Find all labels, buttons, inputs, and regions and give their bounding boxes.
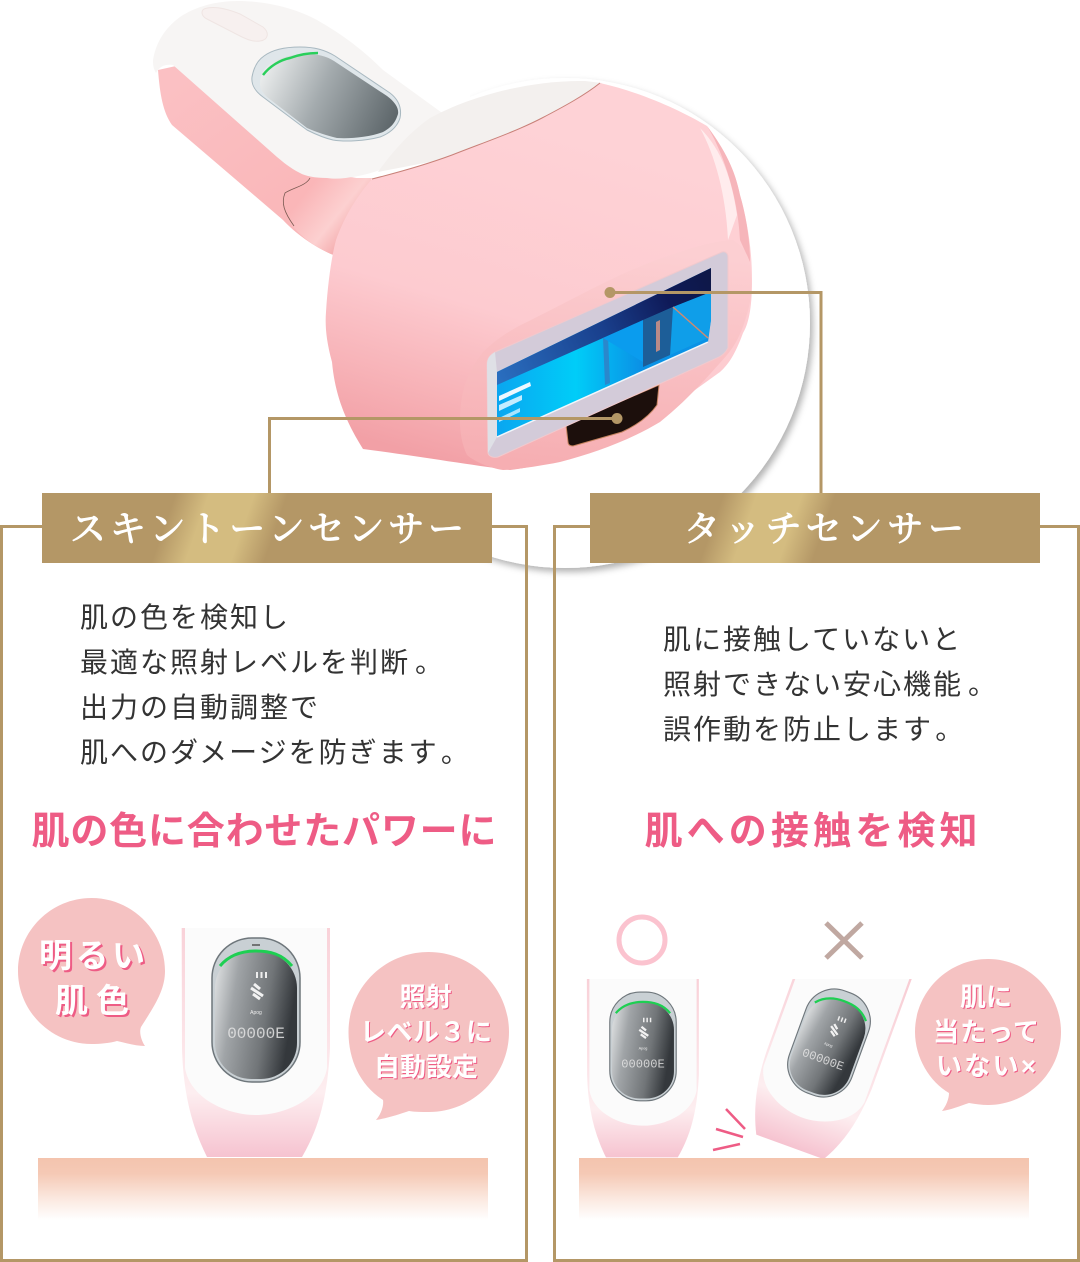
leader line: skin tone sensor xyxy=(270,413,622,494)
speech bubble: level 3 xyxy=(348,952,509,1120)
description text: 最適な照射レベルを判断。 xyxy=(80,647,445,678)
description text xyxy=(80,602,471,768)
description text: 誤作動を防止します。 xyxy=(663,714,965,745)
icon: circle ok xyxy=(619,917,665,963)
window frame xyxy=(487,252,728,457)
speech bubble: level 3: レベル３に xyxy=(360,1017,492,1047)
description text: 肌に接触していないと xyxy=(663,624,962,655)
panel: skin tone sensor xyxy=(2,493,526,1260)
pink subheading: 肌の色に合わせたパワーに xyxy=(32,811,496,853)
speech bubble: level 3: 照射 xyxy=(399,982,452,1012)
magnifier circle xyxy=(490,79,817,576)
speech bubble: not touching xyxy=(915,959,1061,1111)
window surround lip xyxy=(460,240,752,470)
description text: 出力の自動調整で xyxy=(80,692,320,723)
sensor recess xyxy=(566,385,659,446)
heading banner: skin tone sensor xyxy=(42,493,492,563)
description text xyxy=(663,624,998,745)
window glass xyxy=(497,268,711,437)
heading banner: touch sensor: タッチセンサー xyxy=(684,509,964,549)
description text: 照射できない安心機能。 xyxy=(663,669,998,700)
device illustration: tilted: 00000E xyxy=(800,1046,846,1074)
speech bubble: bright skin: 肌色 xyxy=(55,982,129,1019)
speech bubble: level 3: 自動設定 xyxy=(374,1052,478,1082)
device illustration: level display xyxy=(182,928,330,1157)
skin surface xyxy=(38,1158,488,1220)
speech bubble: not touching: いない× xyxy=(936,1051,1036,1081)
description text: 肌の色を検知し xyxy=(80,602,290,633)
device head close-up xyxy=(326,81,752,470)
device illustration: touching xyxy=(586,979,699,1158)
speech bubble: bright skin xyxy=(18,898,165,1046)
device illustration: level display: Apog xyxy=(250,1010,262,1016)
description text: 肌へのダメージを防ぎます。 xyxy=(80,737,471,768)
heading banner: skin tone sensor: スキントーンセンサー xyxy=(70,509,464,549)
pink subheading: 肌への接触を検知 xyxy=(644,811,978,853)
leader line: touch sensor xyxy=(604,287,821,494)
skin surface xyxy=(579,1158,1029,1220)
icon: impact ticks xyxy=(713,1109,745,1150)
speech bubble: bright skin: 明るい xyxy=(39,937,145,974)
device illustration: tilted: Apog xyxy=(823,1042,833,1048)
device illustration: touching: Apog xyxy=(639,1046,647,1050)
device handle illustration xyxy=(153,1,445,256)
device illustration: level display: 00000E xyxy=(227,1025,285,1043)
device illustration: touching: 00000E xyxy=(621,1058,665,1072)
speech bubble: not touching: 当たって xyxy=(933,1017,1039,1047)
heading banner: touch sensor xyxy=(590,493,1040,563)
device illustration: tilted xyxy=(755,979,912,1158)
icon: cross ng xyxy=(826,923,862,958)
panel: touch sensor xyxy=(554,493,1078,1260)
speech bubble: not touching: 肌に xyxy=(960,982,1012,1012)
